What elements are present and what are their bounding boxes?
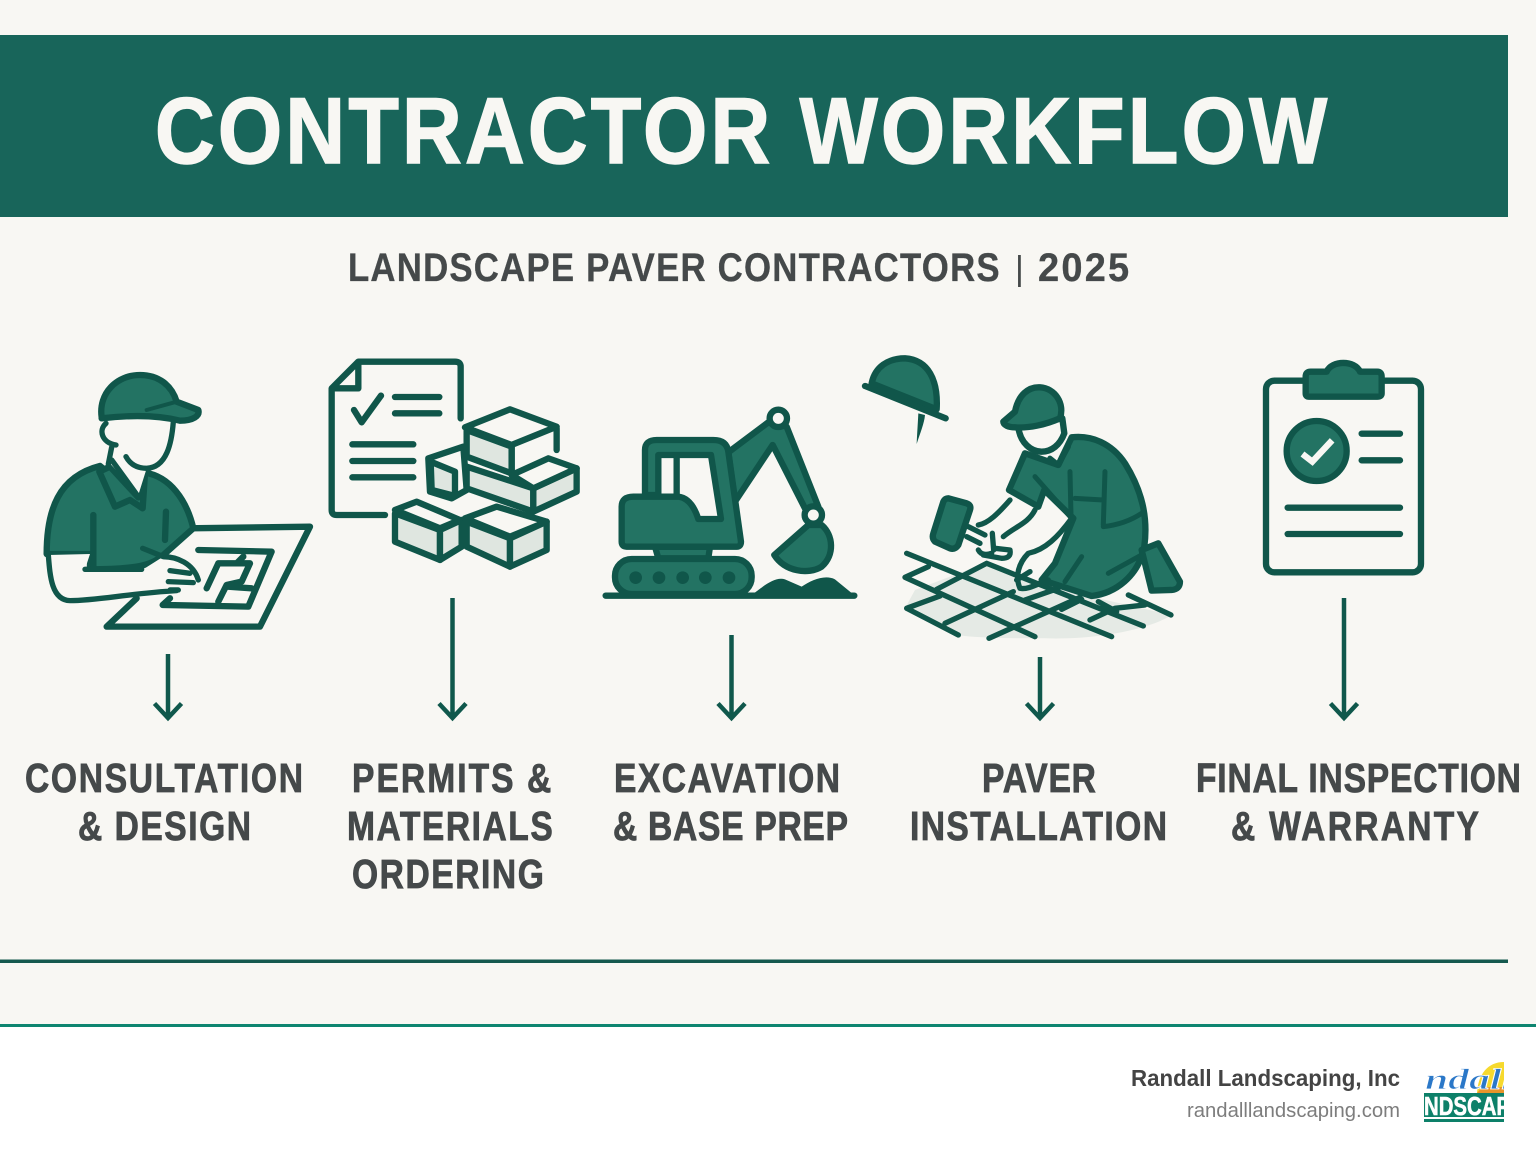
label: consultation and design: & DESIGN [78, 803, 251, 849]
logo [1424, 1062, 1514, 1122]
document [332, 362, 461, 515]
label: consultation and design [25, 755, 303, 849]
icon: worker installing pavers [865, 358, 1180, 638]
label: permits and materials ordering [347, 755, 553, 897]
label: paver installation [910, 755, 1167, 849]
label: excavation and base prep: EXCAVATION [614, 755, 840, 801]
label: permits and materials ordering: PERMITS & [352, 755, 551, 801]
label: final inspection and warranty: & WARRANTY [1231, 803, 1479, 849]
arrow: step 1 [154, 654, 182, 718]
label: excavation and base prep: & BASE PREP [613, 803, 848, 849]
label: final inspection and warranty: FINAL INSPECTION [1196, 755, 1521, 801]
subtitle: LANDSCAPE PAVER CONTRACTORS [348, 245, 1000, 290]
label: paver installation: INSTALLATION [910, 803, 1167, 849]
icon: mini excavator [606, 410, 854, 596]
paver blocks [428, 447, 467, 498]
arrow: step 4 [1026, 657, 1054, 718]
title: CONTRACTOR WORKFLOW [155, 78, 1328, 183]
arrow: step 5 [1330, 598, 1358, 718]
label: consultation and design: CONSULTATION [25, 755, 303, 801]
arrow: step 3 [718, 635, 745, 718]
company name: Randall Landscaping, Inc [1131, 1065, 1400, 1091]
hard hat [872, 358, 937, 409]
head [1018, 418, 1064, 452]
label: paver installation: PAVER [982, 755, 1096, 801]
ground and tiles [905, 553, 1172, 638]
icon: permit document and paver blocks [332, 362, 577, 567]
arrow: step 2 [439, 598, 466, 718]
title banner [0, 35, 1508, 217]
subtitle: | [1015, 250, 1024, 288]
worker body [1009, 437, 1145, 596]
label: final inspection and warranty [1196, 755, 1521, 849]
footer [0, 1024, 1536, 1154]
label: permits and materials ordering: MATERIALS [347, 803, 553, 849]
company url: randalllandscaping.com [1187, 1100, 1400, 1122]
logo: ndall [1425, 1063, 1514, 1096]
icon: inspection clipboard [1266, 363, 1421, 572]
label: excavation and base prep [613, 755, 848, 849]
icon: designer with blueprint [47, 375, 310, 627]
subtitle: 2025 [1038, 246, 1129, 290]
mallet [967, 527, 1010, 558]
label: permits and materials ordering: ORDERING [352, 851, 544, 897]
